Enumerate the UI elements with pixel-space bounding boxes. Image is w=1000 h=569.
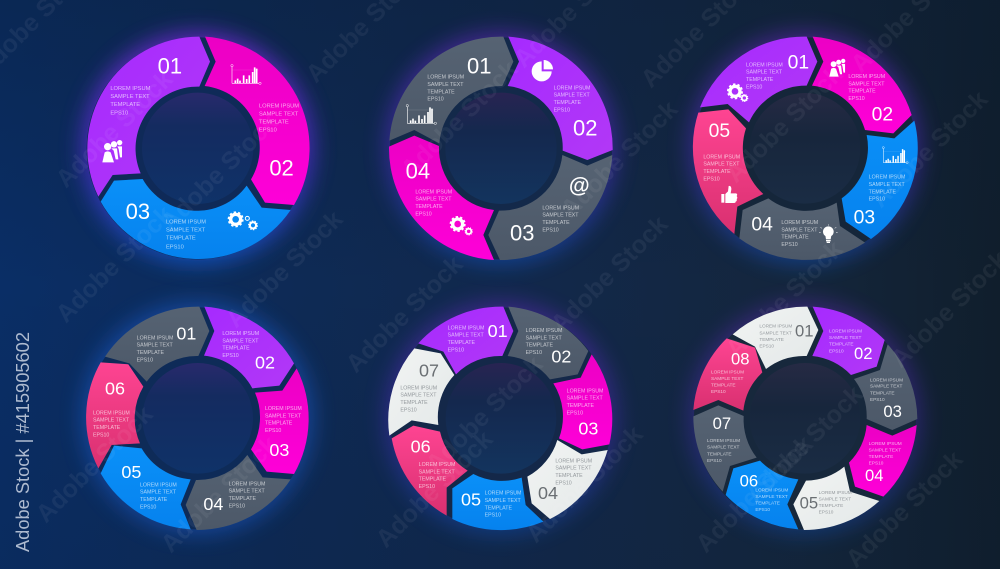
shape 04 [186, 455, 291, 530]
text 01: SAMPLE TEXT [137, 343, 174, 349]
shape 01 [389, 37, 513, 143]
centre disc [750, 93, 860, 204]
glow [81, 32, 314, 265]
number 02: 02 [551, 347, 571, 367]
text 01: LOREM IPSUM [137, 335, 173, 341]
text 03: TEMPLATE [166, 236, 196, 242]
segment 02 [508, 37, 613, 160]
text 02: LOREM IPSUM [829, 329, 862, 335]
segment 01 [105, 307, 209, 382]
number 04: 04 [406, 158, 430, 183]
number 02: 02 [255, 353, 275, 373]
text 03: SAMPLE TEXT [567, 396, 604, 402]
number 07: 07 [713, 414, 731, 433]
shape 02 [508, 307, 588, 379]
shape 04 [389, 136, 494, 260]
number 08: 08 [731, 350, 750, 369]
segment 01 [87, 37, 210, 197]
text 01: EPS10 [759, 343, 774, 349]
text 02: LOREM IPSUM [526, 328, 562, 334]
icon: at sign: @ [569, 173, 590, 197]
shape 08 [693, 338, 762, 411]
text 04: SAMPLE TEXT [869, 448, 901, 454]
watermarks: Adobe Stock [340, 250, 468, 378]
segment 06 [392, 426, 468, 516]
number 02: 02 [269, 156, 294, 181]
shape 03 [553, 354, 612, 449]
glow [81, 302, 314, 535]
segment 05 [693, 109, 763, 234]
ring backing [694, 307, 916, 529]
number 03: 03 [578, 418, 598, 438]
text 05: LOREM IPSUM [819, 490, 852, 496]
text 03: EPS10 [265, 428, 281, 434]
text 02: TEMPLATE [829, 342, 854, 348]
shape 01 [105, 307, 209, 382]
shape 02 [205, 37, 310, 205]
segment 04 [186, 455, 291, 530]
text 02: TEMPLATE [848, 89, 876, 95]
text 01: TEMPLATE [427, 89, 455, 95]
segment 02 [205, 37, 310, 205]
shape 03 [251, 368, 309, 474]
text 07: LOREM IPSUM [707, 438, 740, 444]
text 02: EPS10 [526, 350, 542, 356]
text 05: LOREM IPSUM [703, 154, 740, 160]
text 02: EPS10 [554, 107, 570, 113]
text 03: TEMPLATE [567, 403, 594, 409]
shape 03 [101, 179, 291, 259]
segment 05 [793, 467, 879, 530]
watermarks: Adobe Stock [555, 95, 683, 223]
text 03: TEMPLATE [870, 390, 895, 396]
text 03: SAMPLE TEXT [870, 384, 903, 390]
text 06: LOREM IPSUM [755, 487, 788, 493]
watermarks: Adobe Stock [395, 55, 523, 183]
text 03: SAMPLE TEXT [265, 413, 302, 419]
text 02: LOREM IPSUM [222, 331, 259, 337]
segment 07 [693, 405, 757, 492]
icon: gears [451, 217, 472, 235]
text 03: EPS10 [567, 410, 583, 416]
text 01: SAMPLE TEXT [427, 82, 464, 88]
shape 05 [693, 109, 763, 234]
text 08: SAMPLE TEXT [711, 376, 744, 382]
number 04: 04 [865, 466, 884, 485]
text 02: EPS10 [222, 353, 239, 359]
number 01: 01 [788, 53, 809, 74]
text 05: TEMPLATE [140, 497, 168, 503]
text 01: SAMPLE TEXT [448, 333, 485, 339]
segment 04 [739, 198, 865, 260]
watermarks: Adobe Stock [50, 65, 178, 193]
watermarks: Adobe Stock [420, 350, 548, 478]
text 04: LOREM IPSUM [781, 220, 818, 226]
text 04: TEMPLATE [869, 454, 893, 460]
text 01: SAMPLE TEXT [110, 94, 150, 100]
text 06: TEMPLATE [419, 477, 446, 483]
text 06: SAMPLE TEXT [419, 469, 456, 475]
segment 04 [527, 440, 608, 519]
icon: thumbs up [721, 186, 737, 203]
centre disc [142, 363, 253, 474]
text 01: LOREM IPSUM [110, 86, 151, 92]
shape 05 [452, 474, 543, 530]
text 02: TEMPLATE [526, 343, 553, 349]
text 07: SAMPLE TEXT [400, 393, 437, 399]
text 02: SAMPLE TEXT [848, 81, 885, 87]
text 04: EPS10 [415, 211, 432, 217]
segment 01 [733, 307, 818, 369]
number 05: 05 [461, 489, 481, 509]
shape 01 [700, 37, 817, 122]
segment 03 [251, 368, 309, 474]
icon: gears [728, 84, 748, 101]
segment 03 [854, 344, 917, 430]
centre disc [750, 363, 860, 474]
text 01: LOREM IPSUM [448, 325, 484, 331]
number 02: 02 [573, 116, 597, 141]
text 06: TEMPLATE [755, 500, 780, 506]
text 04: LOREM IPSUM [869, 441, 902, 447]
chart: three-part cycle [81, 32, 314, 265]
segment 05 [452, 474, 543, 530]
text 04: SAMPLE TEXT [415, 197, 452, 203]
segment 04 [849, 425, 917, 497]
segment 03 [842, 121, 918, 239]
watermarks: Adobe Stock [50, 200, 178, 328]
text 02: EPS10 [259, 128, 277, 134]
shape 05 [793, 467, 879, 530]
shape 05 [101, 446, 191, 529]
text 02: SAMPLE TEXT [526, 335, 563, 341]
segment 03 [553, 354, 612, 449]
text 07: LOREM IPSUM [400, 385, 437, 391]
text 04: SAMPLE TEXT [555, 466, 592, 472]
text 05: EPS10 [819, 510, 834, 516]
text 05: SAMPLE TEXT [703, 162, 740, 168]
text 04: LOREM IPSUM [229, 481, 265, 487]
segment 02 [812, 37, 912, 133]
icon: light bulb [819, 224, 838, 243]
text 01: TEMPLATE [759, 337, 784, 343]
text 01: SAMPLE TEXT [746, 70, 783, 76]
text 02: LOREM IPSUM [554, 85, 590, 91]
chart: five-part cycle [688, 32, 922, 265]
number 07: 07 [419, 361, 439, 381]
text 01: EPS10 [110, 111, 128, 117]
icon: pie chart [532, 60, 553, 81]
number 01: 01 [467, 53, 491, 78]
number 01: 01 [176, 324, 196, 344]
text 02: LOREM IPSUM [259, 104, 299, 110]
icon: bar chart [882, 147, 908, 164]
number 06: 06 [411, 437, 431, 457]
number 03: 03 [883, 402, 902, 421]
text 05: TEMPLATE [703, 169, 731, 175]
text 03: SAMPLE TEXT [869, 182, 906, 188]
segment 02 [812, 307, 885, 375]
shape 07 [693, 405, 757, 492]
shape 06 [726, 461, 798, 529]
text 03: LOREM IPSUM [166, 220, 206, 226]
text 01: EPS10 [427, 97, 444, 103]
number 06: 06 [105, 379, 125, 399]
watermarks: Adobe Stock [370, 425, 498, 553]
shape 02 [204, 307, 294, 388]
watermarks: Adobe Stock [865, 85, 993, 213]
watermarks: Adobe Stock [30, 400, 158, 528]
ring backing [694, 37, 916, 259]
centre disc [142, 93, 253, 204]
shape 03 [854, 344, 917, 430]
text 03: TEMPLATE [869, 189, 896, 195]
text 06: LOREM IPSUM [419, 462, 455, 468]
shape 06 [392, 426, 468, 516]
watermarks: Adobe Stock [520, 420, 648, 548]
text 01: EPS10 [746, 84, 762, 90]
shape 03 [842, 121, 918, 239]
number 01: 01 [488, 321, 508, 341]
text 01: LOREM IPSUM [759, 324, 792, 330]
text 03: EPS10 [869, 197, 885, 203]
text 01: TEMPLATE [110, 102, 140, 108]
shape 02 [812, 307, 885, 375]
watermarks: Adobe Stock [155, 108, 283, 236]
text 02: TEMPLATE [259, 120, 289, 126]
watermarks: Adobe Stock [720, 235, 848, 363]
text 07: EPS10 [707, 458, 722, 464]
text 06: TEMPLATE [93, 425, 121, 431]
text 04: EPS10 [869, 460, 884, 466]
text 01: SAMPLE TEXT [759, 330, 792, 336]
segment 01 [700, 37, 817, 122]
text 03: EPS10 [542, 227, 559, 233]
number 04: 04 [538, 483, 558, 503]
text 01: TEMPLATE [448, 340, 475, 346]
text 05: EPS10 [703, 176, 720, 182]
shape 01 [87, 37, 210, 197]
text 01: TEMPLATE [137, 350, 164, 356]
text 06: EPS10 [755, 507, 770, 513]
shape 04 [527, 440, 608, 519]
shape 07 [388, 348, 454, 436]
text 03: LOREM IPSUM [567, 388, 603, 394]
ring backing [87, 37, 309, 259]
text 01: EPS10 [137, 357, 153, 363]
segment 03 [101, 179, 291, 259]
segment 03 [488, 155, 612, 260]
number 01: 01 [795, 322, 814, 341]
text 02: EPS10 [848, 96, 865, 102]
text 04: SAMPLE TEXT [229, 489, 266, 495]
shape 04 [849, 425, 917, 497]
segment 02 [204, 307, 294, 388]
text 07: TEMPLATE [400, 400, 428, 406]
text 01: EPS10 [448, 347, 464, 353]
text 08: LOREM IPSUM [711, 369, 744, 375]
text 05: SAMPLE TEXT [819, 497, 851, 503]
text 03: EPS10 [870, 397, 885, 403]
ring backing [87, 307, 309, 529]
segment 02 [508, 307, 588, 379]
number 01: 01 [158, 53, 182, 78]
segment 04 [389, 136, 494, 260]
centre disc [445, 93, 557, 204]
text 03: TEMPLATE [265, 421, 293, 427]
text 06: SAMPLE TEXT [755, 494, 788, 500]
text 02: SAMPLE TEXT [259, 112, 299, 118]
text 01: LOREM IPSUM [746, 62, 783, 68]
segment 08 [693, 338, 762, 411]
chart: four-part cycle [384, 32, 618, 265]
chart: seven-part cycle [384, 302, 618, 535]
text 02: SAMPLE TEXT [829, 335, 862, 341]
text 04: LOREM IPSUM [555, 458, 592, 464]
icon: people [829, 59, 845, 77]
shape 02 [812, 37, 912, 133]
text 01: TEMPLATE [746, 77, 774, 83]
number 05: 05 [709, 121, 730, 142]
text 08: EPS10 [711, 389, 726, 395]
text 04: EPS10 [781, 242, 798, 248]
shape 03 [488, 155, 612, 260]
vertical stock credit: Adobe Stock | #415905602 [13, 332, 33, 552]
watermarks: Adobe Stock [720, 60, 848, 188]
text 05: TEMPLATE [819, 503, 843, 509]
chart: eight-part cycle [688, 302, 922, 535]
text 02: EPS10 [829, 348, 844, 354]
text 01: LOREM IPSUM [427, 75, 464, 81]
number 03: 03 [510, 220, 534, 245]
text 03: LOREM IPSUM [870, 377, 903, 383]
shape 02 [508, 37, 613, 160]
number 03: 03 [854, 207, 875, 228]
icon: gears [229, 212, 257, 230]
number 05: 05 [121, 462, 141, 482]
icon: bar chart [231, 64, 261, 84]
segment 01 [389, 37, 513, 143]
text 02: LOREM IPSUM [848, 74, 885, 80]
shape 01 [418, 307, 513, 374]
icon: people [102, 140, 122, 162]
text 03: LOREM IPSUM [542, 205, 579, 211]
text 03: LOREM IPSUM [869, 175, 905, 181]
text 03: TEMPLATE [542, 220, 570, 226]
glow [384, 302, 618, 535]
shape 06 [86, 362, 143, 468]
number 05: 05 [800, 493, 818, 512]
shape 01 [733, 307, 818, 369]
number 03: 03 [269, 440, 289, 460]
number 03: 03 [126, 199, 150, 224]
text 07: EPS10 [400, 407, 417, 413]
text 02: TEMPLATE [554, 100, 581, 106]
text 08: TEMPLATE [711, 383, 736, 389]
text 03: SAMPLE TEXT [166, 228, 206, 234]
segment 06 [86, 362, 143, 468]
text 07: SAMPLE TEXT [707, 445, 740, 451]
text 03: LOREM IPSUM [265, 406, 302, 412]
text 06: SAMPLE TEXT [93, 418, 130, 424]
text 04: SAMPLE TEXT [781, 227, 818, 233]
glow [688, 32, 922, 265]
number 06: 06 [740, 471, 758, 490]
text 06: EPS10 [93, 432, 109, 438]
text 04: TEMPLATE [555, 473, 583, 479]
text 06: LOREM IPSUM [93, 410, 130, 416]
text 05: SAMPLE TEXT [485, 498, 522, 504]
watermarks: Adobe Stock [545, 210, 673, 338]
ring backing [390, 307, 612, 529]
text 06: EPS10 [419, 484, 435, 490]
watermarks: Adobe Stock [690, 430, 818, 558]
text 03: EPS10 [166, 244, 184, 250]
text 05: SAMPLE TEXT [140, 490, 177, 496]
number 02: 02 [854, 344, 873, 363]
text 02: SAMPLE TEXT [554, 93, 591, 99]
text 04: TEMPLATE [229, 496, 256, 502]
text 04: TEMPLATE [781, 235, 809, 241]
text 04: LOREM IPSUM [415, 189, 452, 195]
watermarks: Adobe Stock [155, 430, 283, 558]
text 05: EPS10 [140, 504, 156, 510]
text 04: EPS10 [229, 503, 245, 509]
text 07: TEMPLATE [707, 451, 732, 457]
text 04: TEMPLATE [415, 204, 443, 210]
text 05: LOREM IPSUM [140, 482, 177, 488]
ring backing [390, 37, 612, 259]
segment 06 [726, 461, 798, 529]
watermarks: Adobe Stock [220, 205, 348, 333]
shape 04 [739, 198, 865, 260]
text 05: EPS10 [485, 513, 501, 519]
glow [688, 302, 922, 535]
text 02: TEMPLATE [222, 346, 250, 352]
text 05: TEMPLATE [485, 505, 512, 511]
segment 01 [418, 307, 513, 374]
segment 05 [101, 446, 191, 529]
text 03: SAMPLE TEXT [542, 213, 579, 219]
watermarks: Adobe Stock [740, 380, 868, 508]
chart: six-part cycle [81, 302, 314, 535]
text 04: EPS10 [555, 480, 572, 486]
icon: bar chart [406, 104, 436, 124]
text 05: LOREM IPSUM [485, 491, 521, 497]
number 02: 02 [872, 104, 893, 125]
glow [384, 32, 618, 265]
centre disc [446, 363, 556, 474]
segment 07 [388, 348, 454, 436]
number 04: 04 [751, 215, 773, 236]
number 04: 04 [203, 494, 223, 514]
text 02: SAMPLE TEXT [222, 338, 259, 344]
